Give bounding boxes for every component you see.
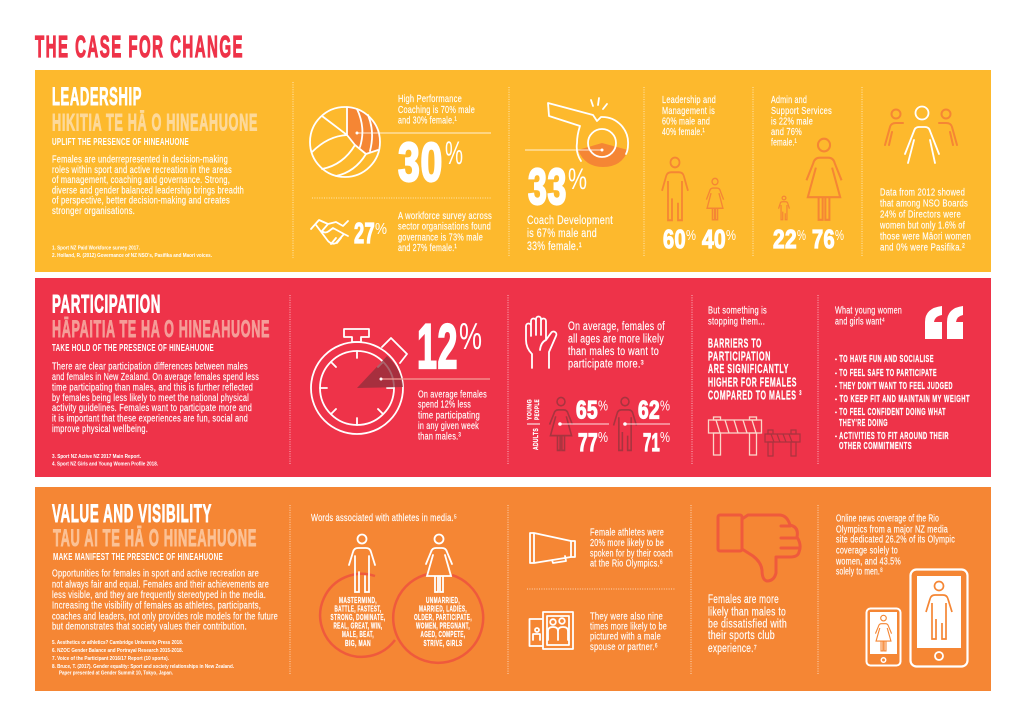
- participation heading: TAKE HOLD OF THE PRESENCE OF HINEAHUONE: [52, 343, 214, 354]
- chart: young people and adults by gender: [526, 396, 670, 457]
- text: barriers to participation: PARTICIPATION: [708, 348, 771, 364]
- text: NSO boards data: women but only 1.6% of: [879, 220, 965, 232]
- value and visibility body text: Opportunities for females in sport and active recreation are: [52, 568, 259, 580]
- venn diagram: words used for male and female athletes: STRIVE, GIRLS: [424, 638, 462, 648]
- participation heading: [52, 290, 270, 354]
- participation footnotes: 3. Sport NZ Active NZ 2017 Main Report.: [52, 454, 141, 460]
- stat: leadership and management: Leadership and: [662, 94, 716, 106]
- value and visibility body text: coaches and leaders, not only provides role models for the future: [52, 610, 278, 622]
- value and visibility body text: but demonstrates that society values their contribution.: [52, 620, 247, 632]
- chart: young people and adults by gender: 71: [643, 429, 660, 457]
- stat: admin and support services: %: [797, 227, 806, 244]
- leadership body text: of management, coaching and governance. Strong,: [52, 174, 230, 186]
- stat: governance: 27: [354, 218, 375, 250]
- stat: coach development: %: [568, 163, 587, 196]
- text: pictured with male spouse: [590, 610, 667, 653]
- stat: admin and support services: and 76%: [771, 126, 802, 138]
- text: barriers to participation: COMPARED TO MALES ³: [708, 388, 802, 402]
- text: spoken for by coach: [590, 526, 673, 570]
- stat: admin and support services: 22: [773, 224, 797, 254]
- value and visibility body text: [52, 568, 278, 632]
- value and visibility heading: VALUE AND VISIBILITY: [52, 500, 212, 528]
- participation footnotes: [52, 454, 158, 468]
- stat: governance: sector organisations found: [398, 220, 491, 232]
- text: what young women and girls want: - TO FEEL SAFE TO PARTICIPATE: [835, 367, 937, 379]
- stat: 12 percent less time: spend 12% less: [418, 398, 471, 410]
- text: pictured with male spouse: pictured with a male: [590, 630, 661, 642]
- icon: thumbs down: [718, 515, 800, 581]
- chart: young people and adults by gender: 77: [578, 429, 598, 457]
- stat: coach development: 33: [528, 158, 567, 215]
- text: barriers to participation: stopping them...: [708, 316, 765, 328]
- leadership heading: UPLIFT THE PRESENCE OF HINEAHUONE: [52, 137, 189, 148]
- chart: young people and adults by gender: YOUNG: [526, 399, 534, 420]
- participation body text: activity guidelines. Females want to participate more and: [52, 402, 252, 414]
- text: sports club dissatisfaction: [708, 594, 787, 655]
- stat: 12 percent less time: 12: [417, 312, 458, 382]
- panel: leadership: [35, 70, 991, 272]
- text: more likely to want to participate: [568, 321, 665, 370]
- text: NSO boards data: those were Māori women: [880, 230, 971, 242]
- icon: stopwatch: [311, 329, 490, 434]
- value and visibility body text: not always fair and equal. Females and their achievements are: [52, 578, 269, 590]
- value and visibility body text: less visible, and they are frequently stereotyped in the media.: [52, 589, 266, 601]
- text: what young women and girls want: and girls want⁴: [835, 316, 885, 328]
- leadership body text: stronger organisations.: [52, 205, 135, 217]
- participation body text: and females in New Zealand. On average females spend less: [52, 371, 259, 383]
- text: what young women and girls want: - TO HAVE FUN AND SOCIALISE: [835, 353, 934, 365]
- chart: young people and adults by gender: 62: [638, 396, 660, 424]
- leadership body text: [52, 154, 244, 217]
- text: spoken for by coach: spoken for by their coach: [590, 548, 673, 560]
- text: online news coverage: coverage solely to: [836, 544, 898, 556]
- text: barriers to participation: ARE SIGNIFICANTLY: [708, 361, 789, 376]
- venn diagram: words used for male and female athletes: UNMARRIED,: [426, 595, 460, 605]
- stat: leadership and management: 40% female.¹: [662, 126, 705, 138]
- participation footnotes: 4. Sport NZ Girls and Young Women Profile 2018.: [52, 462, 158, 468]
- participation body text: [52, 360, 259, 435]
- stat: leadership and management: %: [726, 227, 736, 244]
- participation body text: by females being less likely to meet the national physical: [52, 392, 249, 404]
- icon: small phone with female figure: [866, 608, 900, 666]
- stat: leadership and management: Management is: [662, 105, 715, 117]
- stat: governance: governance is 73% male: [398, 232, 483, 244]
- icon: raised hand: [526, 316, 556, 368]
- leadership heading: HIKITIA TE HĀ O HINEAHUONE: [52, 110, 258, 136]
- text: pictured with male spouse: They were also nine: [590, 610, 663, 622]
- icon: whistle: [525, 98, 628, 167]
- stat: leadership and management: 40: [702, 224, 726, 254]
- stat: coach development: Coach Development: [527, 215, 613, 227]
- stat: governance: %: [375, 221, 387, 238]
- leadership body text: roles within sport and active recreation in the areas: [52, 164, 232, 176]
- icon: volleyball: [310, 107, 380, 177]
- venn diagram: words used for male and female athletes: STRONG, DOMINATE,: [330, 612, 386, 622]
- venn diagram: words used for male and female athletes: WOMEN, PREGNANT,: [416, 620, 470, 630]
- stat: leadership and management: 60: [663, 224, 686, 254]
- text: more likely to want to participate: On average, females of: [568, 321, 665, 333]
- text: spoken for by coach: Female athletes were: [590, 526, 664, 538]
- stat: 12 percent less time: in any given week: [418, 420, 479, 432]
- icon: large barrier: [708, 417, 762, 455]
- text: barriers to participation: [708, 304, 802, 402]
- leadership body text: Females are underrepresented in decision-making: [52, 154, 228, 166]
- text: online news coverage: site dedicated 26.2% of its Olympic: [836, 534, 955, 546]
- chart: young people and adults by gender: %: [660, 398, 670, 414]
- text: what young women and girls want: THEY'RE DOING: [839, 417, 888, 429]
- text: sports club dissatisfaction: their sports club: [708, 630, 775, 642]
- chart: young people and adults by gender: PEOPLE: [534, 399, 541, 420]
- value and visibility heading: MAKE MANIFEST THE PRESENCE OF HINEAHUONE: [53, 552, 223, 563]
- leadership body text: diverse and gender balanced leadership brings breadth: [52, 184, 244, 196]
- value and visibility footnotes: 7. Voice of the Participant 2016/17 Report (10 sports).: [52, 656, 169, 662]
- text: NSO boards data: and 0% were Pasifika.²: [880, 242, 965, 254]
- venn diagram: words used for male and female athletes: [320, 534, 483, 663]
- text: NSO boards data: Data from 2012 showed: [880, 186, 965, 198]
- participation body text: There are clear participation differences between males: [52, 360, 248, 372]
- leadership body text: of perspective, better decision-making and creates: [52, 194, 230, 206]
- stat: admin and support services: Support Services: [771, 105, 832, 117]
- venn diagram: words used for male and female athletes: MASTERMIND,: [339, 595, 377, 605]
- chart: young people and adults by gender: %: [598, 398, 608, 414]
- stat: leadership and management: %: [686, 227, 696, 244]
- stat: coach development: is 67% male and: [527, 228, 597, 240]
- stat: 12 percent less time: time participating: [418, 410, 480, 422]
- value and visibility footnotes: 6. NZOC Gender Balance and Portrayal Research 2015-2018.: [52, 648, 183, 654]
- icon: quotation marks: [925, 306, 963, 339]
- stat: governance: A workforce survey across: [398, 210, 492, 222]
- value and visibility heading: TAU AI TE HĀ O HINEAHUONE: [53, 525, 257, 552]
- text: what young women and girls want: [835, 304, 970, 452]
- venn diagram: words used for male and female athletes: MALE, BEAT,: [342, 629, 374, 639]
- venn diagram: words used for male and female athletes: AGED, COMPETE,: [420, 629, 466, 639]
- stat: 12 percent less time: %: [459, 316, 482, 357]
- icon: board directors group: [885, 106, 957, 163]
- stat: 12 percent less time: On average females: [418, 388, 487, 400]
- stat: governance: and 27% female.¹: [398, 242, 457, 254]
- chart: young people and adults by gender: %: [660, 429, 670, 446]
- venn diagram: words used for male and female athletes: REAL, GREAT, WIN,: [334, 620, 382, 630]
- stat: leadership and management: [662, 94, 736, 254]
- chart: young people and adults by gender: ADULTS: [531, 428, 540, 450]
- stat: high performance coaching: Coaching is 70% male: [398, 104, 475, 116]
- participation body text: it is important that these experiences are fun, social and: [52, 412, 248, 424]
- stat: coach development: [527, 158, 613, 253]
- stat: high performance coaching: High Performance: [398, 93, 462, 105]
- stat: 12 percent less time: [417, 312, 487, 442]
- text: online news coverage: women, and 43.5%: [835, 556, 901, 568]
- text: barriers to participation: HIGHER FOR FEMALES: [708, 374, 797, 390]
- value and visibility footnotes: [52, 640, 234, 676]
- value and visibility footnotes: 5. Aesthetics or athletics? Cambridge University Press 2018.: [52, 640, 183, 646]
- icon: large phone with male figure: [910, 570, 968, 666]
- text: NSO boards data: 24% of Directors were: [880, 208, 961, 220]
- text: more likely to want to participate: than males to want to: [568, 346, 659, 358]
- venn diagram: words used for male and female athletes: BIG, MAN: [345, 638, 371, 648]
- stat: high performance coaching: 30: [398, 131, 443, 193]
- venn diagram: words used for male and female athletes: MARRIED, LADIES,: [419, 604, 467, 614]
- icon: small barrier: [765, 430, 800, 456]
- text: spoken for by coach: at the Rio Olympics.⁶: [590, 558, 663, 570]
- text: sports club dissatisfaction: experience.⁷: [708, 643, 757, 655]
- value and visibility footnotes: 8. Bruce, T. (2017). Gender equality: Sport and society relationships in New Zealand.: [52, 664, 234, 670]
- chart: young people and adults by gender: %: [598, 429, 608, 446]
- text: what young women and girls want: OTHER COMMITMENTS: [839, 440, 912, 452]
- text: THE CASE FOR CHANGE: [35, 29, 244, 64]
- stat: admin and support services: %: [835, 227, 844, 244]
- text: sports club dissatisfaction: be dissatisfied with: [708, 618, 787, 630]
- leadership heading: LEADERSHIP: [52, 83, 142, 111]
- panel: participation: [35, 278, 991, 477]
- stat: admin and support services: female.¹: [771, 136, 797, 148]
- stat: high performance coaching: [356, 93, 491, 193]
- text: sports club dissatisfaction: likely than males to: [708, 606, 786, 618]
- text: online news coverage: Online news coverage of the Rio: [836, 512, 939, 524]
- text: more likely to want to participate: all ages are more likely: [568, 334, 664, 346]
- participation body text: time participating than males, and this is further reflected: [52, 382, 253, 394]
- venn diagram: words used for male and female athletes: BATTLE, FASTEST,: [334, 604, 382, 614]
- panel: value and visibility: [35, 487, 991, 691]
- stat: governance: [354, 210, 492, 254]
- text: barriers to participation: BARRIERS TO: [708, 336, 762, 350]
- stat: admin and support services: Admin and: [771, 94, 807, 106]
- stat: 12 percent less time: than males.³: [418, 430, 461, 442]
- stat: admin and support services: [771, 94, 844, 254]
- value and visibility body text: Increasing the visibility of females as athletes, participants,: [52, 600, 261, 612]
- stat: admin and support services: is 22% male: [771, 116, 813, 128]
- participation heading: PARTICIPATION: [52, 290, 161, 318]
- icon: picture frames: [530, 612, 573, 649]
- value and visibility heading: [52, 500, 257, 563]
- leadership footnotes: [52, 246, 212, 259]
- text: online news coverage: [835, 512, 955, 578]
- stat: high performance coaching: %: [445, 135, 463, 171]
- text: NSO boards data: that among NSO Boards: [880, 198, 968, 210]
- leadership footnotes: 2. Holland, R. (2012) Governance of NZ NSO's, Pasifika and Maori voices.: [52, 253, 212, 259]
- text: online news coverage: Olympics from a major NZ media: [836, 524, 948, 536]
- text: online news coverage: solely to men.⁸: [836, 566, 883, 578]
- participation heading: HĀPAITIA TE HA O HINEAHUONE: [52, 316, 270, 343]
- text: sports club dissatisfaction: Females are more: [708, 594, 779, 606]
- leadership heading: [52, 83, 258, 148]
- text: barriers to participation: But something is: [708, 304, 767, 316]
- text: spoken for by coach: 20% more likely to be: [590, 537, 664, 549]
- participation body text: improve physical wellbeing.: [52, 423, 148, 435]
- chart: young people and adults by gender: 65: [576, 396, 598, 424]
- stat: admin and support services: 76: [812, 224, 835, 254]
- leadership footnotes: 1. Sport NZ Paid Workforce survey 2017.: [52, 246, 140, 252]
- value and visibility footnotes: Paper presented at Gender Summit 10, Tokyo, Japan.: [59, 670, 173, 676]
- stat: high performance coaching: and 30% female.¹: [398, 114, 457, 126]
- text: pictured with male spouse: times more likely to be: [590, 620, 667, 632]
- venn diagram: words used for male and female athletes: OLDER, PARTICIPATE,: [414, 612, 472, 622]
- icon: handshake: [311, 220, 348, 244]
- text: NSO boards data: [879, 186, 971, 254]
- text: pictured with male spouse: spouse or partner.⁶: [590, 641, 658, 653]
- icon: megaphone: [530, 533, 575, 563]
- text: more likely to want to participate: participate more.³: [568, 358, 644, 370]
- stat: leadership and management: 60% male and: [662, 116, 710, 128]
- stat: coach development: 33% female.¹: [527, 241, 582, 253]
- text: what young women and girls want: What young women: [835, 304, 902, 316]
- text: words associated with athletes: Words associated with athletes in media.⁵: [311, 512, 457, 524]
